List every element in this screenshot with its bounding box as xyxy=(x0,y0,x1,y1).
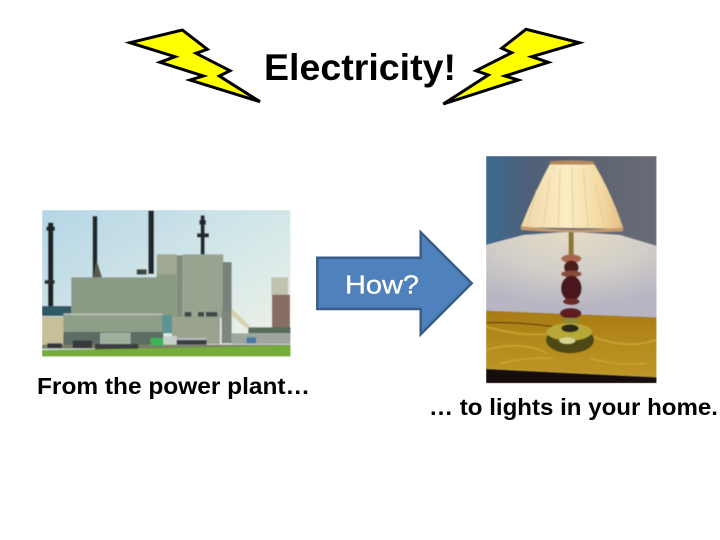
arrow label: How? xyxy=(345,270,419,300)
photo: lamp xyxy=(486,156,657,383)
photo: power plant xyxy=(42,210,291,357)
caption: lights in home: … to lights in your home. xyxy=(429,394,718,420)
caption: power plant: From the power plant… xyxy=(37,373,310,399)
left lightning bolt xyxy=(130,30,260,102)
right lightning bolt xyxy=(443,29,579,104)
arrow with label xyxy=(317,232,472,334)
title: Electricity! xyxy=(264,47,456,88)
